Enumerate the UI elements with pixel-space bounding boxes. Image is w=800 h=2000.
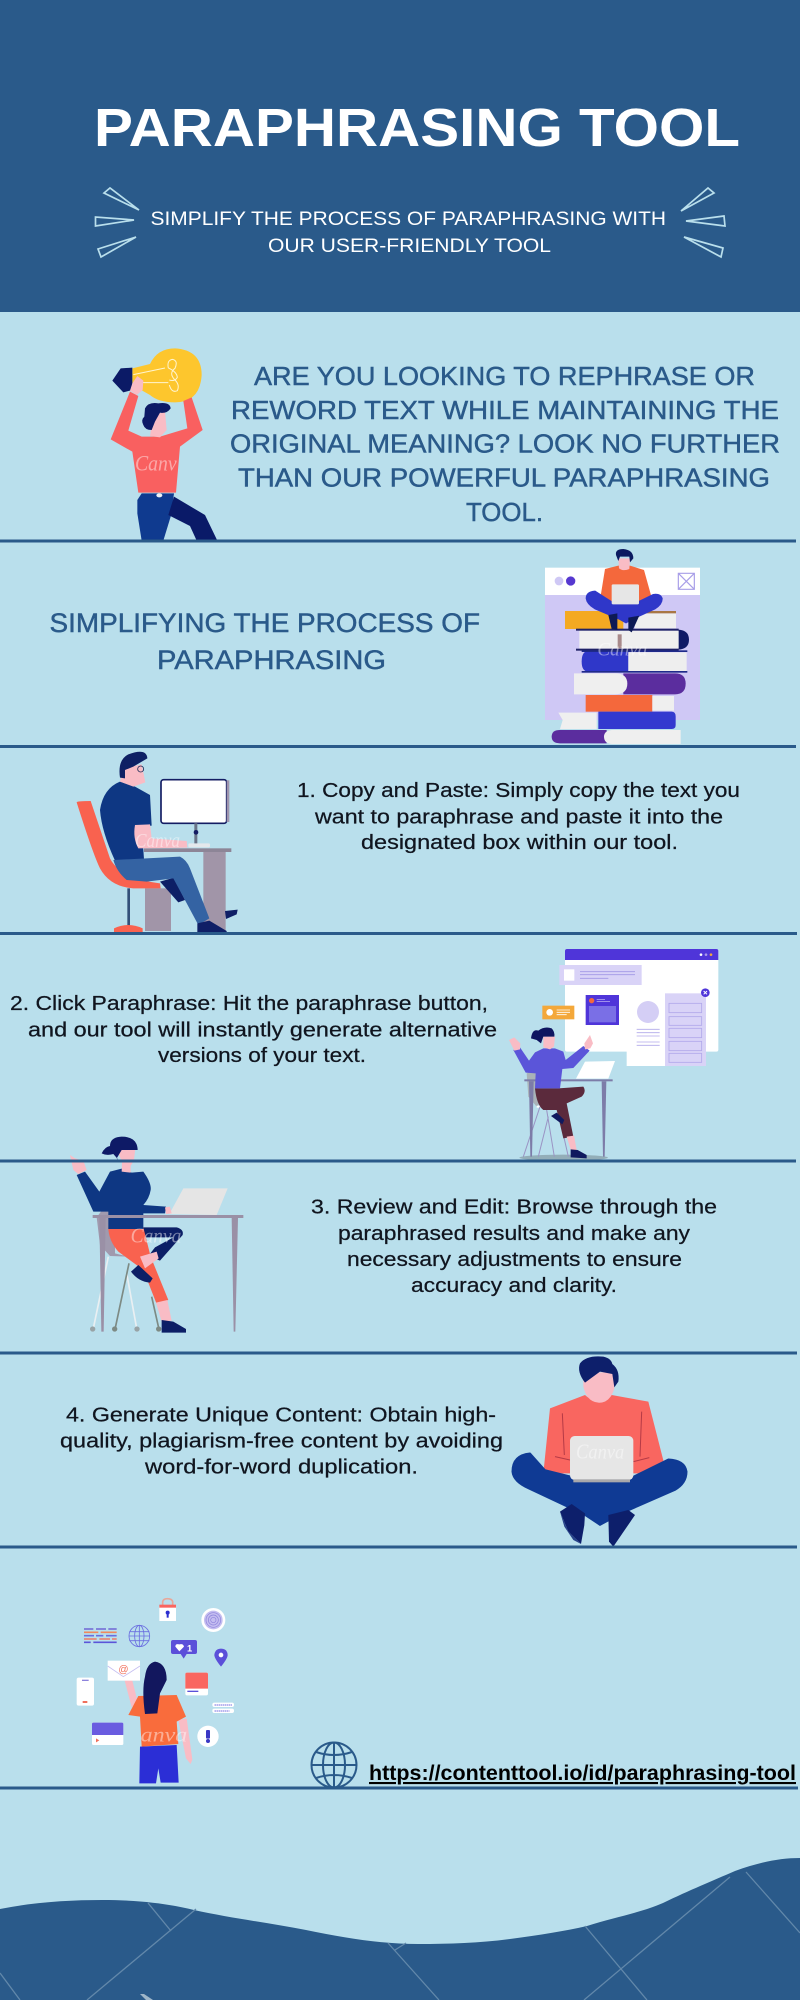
section divider lines [0, 541, 798, 1788]
illustration: cross-legged man with laptop [512, 1356, 687, 1547]
icon: left burst rays [96, 188, 139, 257]
text block: step 2: and our tool will instantly generate alternative [28, 1020, 497, 1042]
text block: intro question: REWORD TEXT WHILE MAINTAINING THE [231, 395, 779, 425]
icon: email envelope: @ [118, 1665, 128, 1676]
text block: step 3: 3. Review and Edit: Browse through the [311, 1197, 717, 1219]
icon: email envelope [108, 1661, 140, 1681]
text block: intro question: TOOL. [466, 497, 543, 527]
icon: right burst rays [681, 188, 725, 257]
panel: header banner [0, 0, 800, 312]
icon: phone [77, 1678, 94, 1706]
arm [124, 1679, 138, 1707]
illustration: man at desktop computer [77, 752, 238, 933]
watermark: anva [141, 1723, 187, 1747]
text block: step 4: 4. Generate Unique Content: Obtain high- [66, 1405, 496, 1427]
title: PARAPHRASING TOOL [94, 98, 740, 158]
text block: intro question: ORIGINAL MEANING? LOOK NO FURTHER [230, 428, 780, 458]
watermark: Canva [576, 1441, 624, 1463]
text block: step 1: designated box within our tool. [361, 832, 678, 854]
watermark: Canv [135, 451, 177, 476]
text block: step 2 [10, 993, 497, 1067]
illustration: man lifting light bulb [111, 348, 217, 541]
icon: padlock [159, 1599, 176, 1621]
illustration: woman sitting at desk with laptop [70, 1137, 243, 1333]
icon: red card [185, 1673, 208, 1695]
icon: like badge [171, 1640, 197, 1659]
heading: simplifying the process: SIMPLIFYING THE PROCESS OF [50, 608, 480, 638]
text block: step 4 [60, 1405, 503, 1479]
text block: step 2: 2. Click Paraphrase: Hit the paraphrase button, [10, 993, 488, 1015]
text block: step 3: necessary adjustments to ensure [347, 1249, 682, 1271]
watermark: Canva [131, 1224, 181, 1248]
subtitle: OUR USER-FRIENDLY TOOL [268, 236, 551, 257]
heading: simplifying the process [50, 608, 480, 675]
text block: step 2: versions of your text. [158, 1045, 366, 1067]
text block: step 4: quality, plagiarism-free content by avoiding [60, 1431, 503, 1453]
text block: step 1: want to paraphrase and paste it into the [314, 806, 723, 828]
text block: intro question: ARE YOU LOOKING TO REPHRASE OR [254, 361, 755, 391]
subtitle [150, 209, 666, 257]
illustration: woman among digital icons [77, 1599, 234, 1783]
subtitle: SIMPLIFY THE PROCESS OF PARAPHRASING WITH [150, 209, 666, 230]
heading: simplifying the process: PARAPHRASING [157, 645, 386, 675]
icon: like badge: 1 [187, 1643, 192, 1653]
text block: step 3: accuracy and clarity. [411, 1275, 617, 1297]
icon: fingerprint [201, 1608, 225, 1632]
footer wave [0, 1858, 800, 2000]
link: website URL: https://contenttool.io/id/paraphrasing-tool [369, 1762, 796, 1785]
text block: step 3 [311, 1197, 717, 1297]
icon: globe [129, 1625, 150, 1647]
text block: intro question: THAN OUR POWERFUL PARAPHRASING [238, 462, 770, 492]
text block: step 1 [297, 780, 740, 854]
text block: intro question [230, 361, 780, 527]
icon: video card [92, 1723, 123, 1745]
illustration: woman with browser windows [509, 949, 718, 1161]
watermark: Canva [597, 640, 647, 661]
icon: globe [312, 1742, 356, 1788]
icon: code lines [84, 1629, 117, 1642]
text block: step 1: 1. Copy and Paste: Simply copy the text you [297, 780, 740, 802]
text block: step 3: paraphrased results and make any [338, 1223, 690, 1245]
icon: password fields [212, 1703, 234, 1713]
illustration: person on stack of books [545, 549, 700, 744]
text block: step 4: word-for-word duplication. [144, 1457, 418, 1479]
icon: alert [197, 1726, 219, 1747]
icon: map pin [214, 1649, 228, 1667]
watermark: Canva [135, 830, 180, 852]
